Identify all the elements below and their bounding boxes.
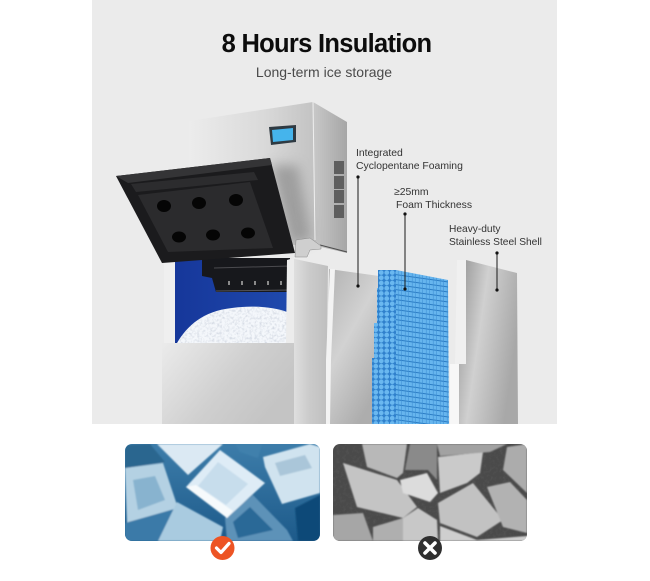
callout: stainless steel shell (449, 224, 542, 292)
icon: dark cross (418, 536, 442, 560)
control screen (269, 125, 296, 145)
lower cabinet front (162, 343, 294, 424)
callout: integrated cyclopentane foaming: Cyclopentane Foaming (356, 161, 463, 172)
subtitle: Long-term ice storage (256, 64, 392, 80)
lower cabinet right pillar (290, 258, 328, 424)
ice chute (202, 258, 290, 292)
hinge (295, 238, 321, 257)
lid holes (157, 194, 255, 242)
background panel (92, 0, 557, 424)
machine upper side (312, 102, 347, 253)
callout: foam thickness: Foam Thickness (396, 200, 472, 211)
callout: integrated cyclopentane foaming: Integrated (356, 148, 403, 159)
callout: stainless steel shell: Heavy-duty (449, 224, 501, 235)
right shell panel (450, 260, 518, 424)
icon: orange check (210, 536, 234, 560)
blue foam layer (372, 270, 449, 424)
callout: foam thickness: ≥25mm (394, 187, 429, 198)
ice machine (116, 102, 347, 424)
left shell panel (326, 269, 379, 424)
title: 8 Hours Insulation (222, 30, 431, 58)
shadow from lid (270, 165, 312, 245)
open lid (116, 158, 295, 263)
machine upper front (189, 102, 316, 245)
ice pile (177, 306, 286, 343)
callout: foam thickness (394, 187, 472, 291)
clear ice photo (125, 444, 320, 541)
side vents (334, 161, 344, 218)
callout: stainless steel shell: Stainless Steel Shell (449, 237, 542, 248)
storage bin cavity (175, 258, 294, 343)
cloudy ice photo (333, 444, 527, 541)
callout: integrated cyclopentane foaming (356, 148, 463, 288)
